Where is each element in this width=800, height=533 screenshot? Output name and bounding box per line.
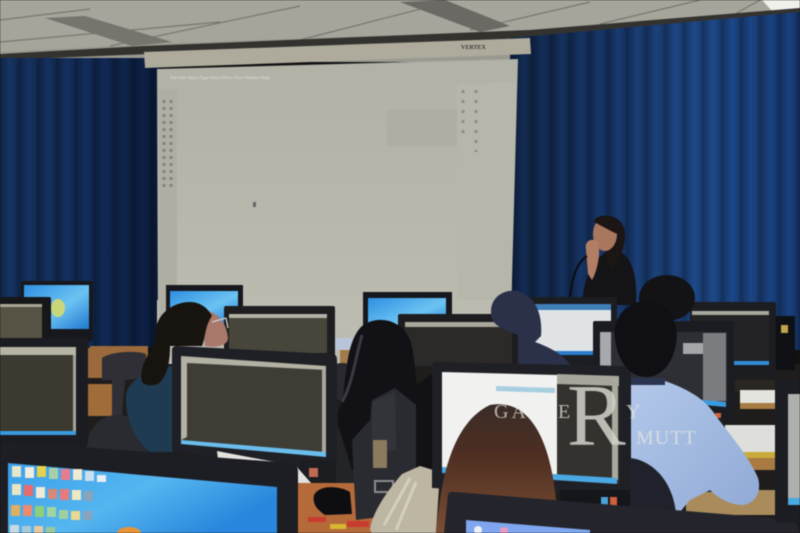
right edge monitor: [775, 380, 800, 523]
watermark: [494, 368, 697, 465]
middle right monitor: [593, 321, 734, 421]
room floor and desks: [0, 340, 800, 533]
projector screen: File Edit Object Type Select Effect View Window Help: [170, 75, 270, 80]
watermark: Y: [626, 401, 640, 423]
front right monitor with white document: [432, 362, 631, 510]
curtains: [0, 12, 800, 350]
back row monitors: [0, 281, 795, 378]
chairs: [86, 352, 360, 484]
seated student: woman with glasses: [126, 302, 228, 452]
woman with brown hair: [436, 404, 558, 533]
beige bag: [370, 466, 440, 533]
front left monitor: [0, 338, 88, 445]
projector screen housing: [144, 38, 531, 68]
center monitor: [172, 346, 337, 510]
seated student: black long hair with backpack: [338, 320, 433, 520]
watermark: E: [558, 401, 570, 423]
left edge person: [0, 386, 46, 448]
watermark: MUTT: [636, 427, 697, 449]
presenter: [570, 216, 636, 305]
watermark: GA: [494, 401, 529, 423]
projector screen housing: VERTEX: [461, 45, 486, 51]
front row left monitor: [0, 441, 298, 533]
front row right monitor: [444, 492, 800, 533]
projector screen: [157, 59, 518, 330]
seated student: dark hoodie: [491, 291, 571, 366]
desk papers on right: [686, 380, 777, 515]
chair in front of man: [630, 458, 676, 513]
watermark: R: [567, 368, 626, 465]
wall beneath screen: [157, 300, 511, 368]
seated student: back right head: [639, 275, 695, 321]
seated student: man in blue shirt: [614, 301, 759, 512]
desktop icons: [10, 466, 106, 533]
orange desk with headphones and candy: [298, 483, 378, 533]
ceiling: [0, 0, 800, 62]
